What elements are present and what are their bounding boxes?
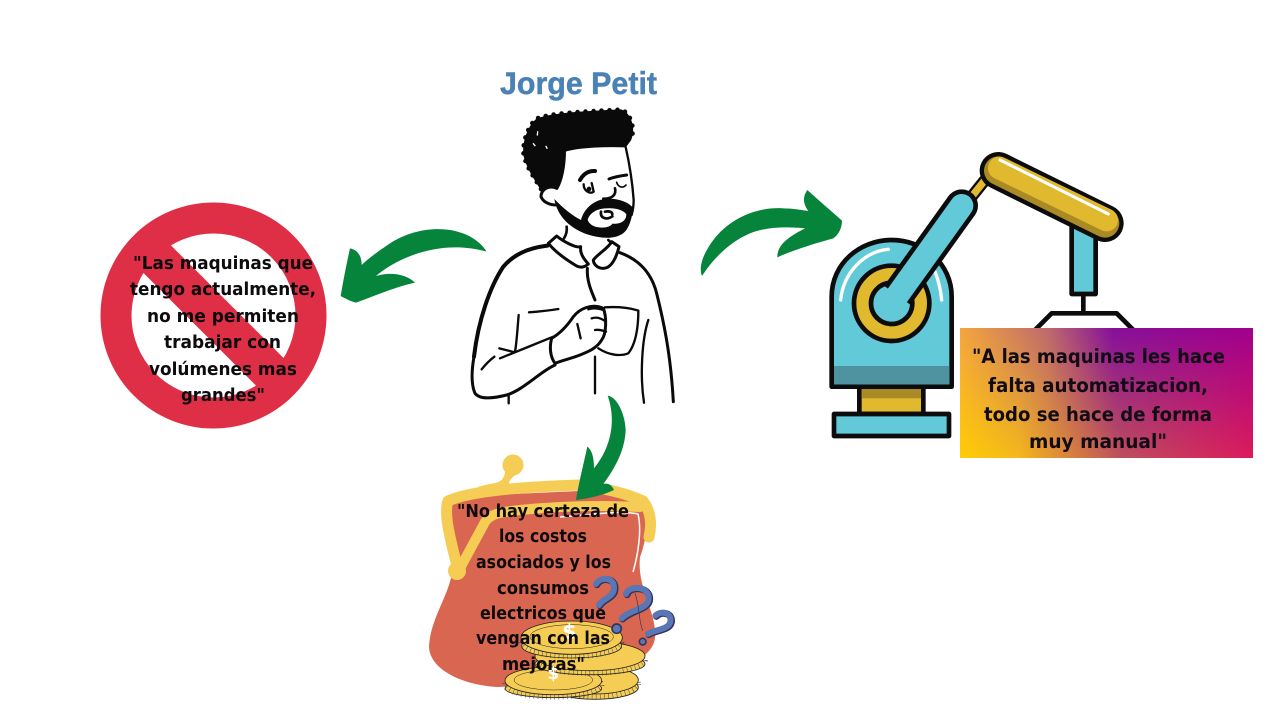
panel: cost uncertainty (429, 396, 672, 699)
mug (598, 307, 638, 355)
illustration: man holding a mug (472, 110, 673, 403)
quote: costs: consumos (497, 579, 589, 599)
arrow: downward (576, 396, 626, 500)
quote: machines: no me permiten (147, 307, 299, 327)
quote: automation: "A las maquinas les hace (972, 345, 1225, 368)
hair (525, 111, 631, 188)
top coin (522, 634, 622, 658)
pendant (1072, 227, 1096, 294)
icon: robot arm (832, 160, 1135, 436)
quote: costs: vengan con las (476, 629, 610, 649)
quote: costs: asociados y los (476, 553, 611, 573)
arrow: to the right (701, 190, 842, 276)
panel: robot arm (832, 160, 1253, 458)
fist (550, 306, 606, 363)
panel: machine limitation (116, 218, 316, 413)
quote: machines: "Las maquinas que (133, 254, 313, 274)
middle coin (535, 653, 645, 675)
eyes, brows and nose (580, 171, 595, 180)
title: Jorge Petit (500, 65, 657, 101)
icon: gold coins (505, 619, 645, 699)
neck (564, 227, 610, 242)
quote: costs: electricos que (480, 604, 606, 624)
quote: costs: mejoras" (502, 655, 585, 675)
lower right coin (552, 675, 638, 699)
clasp knob (478, 466, 530, 490)
quote: automation: falta automatizacion, (988, 374, 1208, 397)
upper arm (998, 171, 1105, 223)
purse body (429, 490, 655, 687)
arrow: to the left (341, 229, 487, 303)
ear (541, 187, 557, 205)
quote: machines: trabajar con (164, 333, 281, 353)
quote: automation: muy manual" (1029, 430, 1167, 453)
man's head (523, 110, 634, 238)
man's torso and arms (472, 227, 673, 403)
icon: question marks (596, 579, 672, 645)
neck (859, 387, 923, 414)
ring joint (854, 266, 929, 341)
icon: gold coins: $ (548, 664, 559, 683)
shoulders and arm (474, 246, 547, 357)
foot (834, 414, 949, 436)
collar (548, 236, 619, 268)
lower left coin (505, 679, 602, 698)
dollar signs: $ (562, 619, 577, 643)
connector (972, 180, 985, 197)
face outline (626, 147, 634, 215)
icon: coin purse (429, 454, 655, 687)
quote: machines: grandes" (181, 386, 265, 406)
prohibition sign (116, 218, 311, 413)
gradient quote box (960, 328, 1253, 458)
quote: machines: tengo actualmente, (130, 280, 316, 300)
beard (554, 199, 633, 238)
lower arm (897, 206, 962, 295)
quote: costs (457, 502, 629, 675)
gripper (1033, 293, 1135, 332)
quote: automation (972, 345, 1225, 453)
body (832, 240, 952, 387)
mouth area (588, 208, 626, 228)
quote: costs: los costos (499, 527, 587, 547)
quote: costs: "No hay certeza de (457, 502, 629, 522)
placket (587, 268, 595, 300)
quote: automation: todo se hace de forma (984, 403, 1212, 426)
quote: machines: volúmenes mas (149, 360, 297, 380)
quote: machines (130, 254, 316, 406)
clasp frame (447, 485, 651, 570)
